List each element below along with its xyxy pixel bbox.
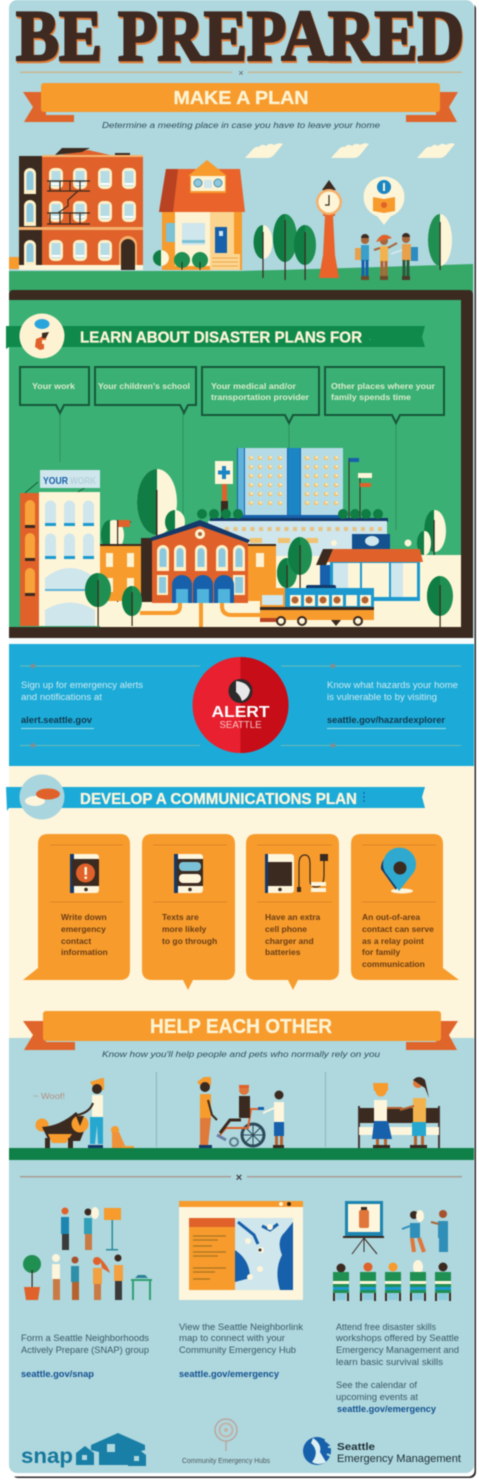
banner: learn about: LEARN ABOUT DISASTER PLANS FOR (80, 330, 362, 346)
banner: make a plan (23, 83, 458, 122)
icon: phone alert (70, 854, 99, 893)
callout: other places: Other places where your (331, 381, 436, 391)
text: workshops (335, 1322, 459, 1414)
logo: community emergency hubs: Community Emergency Hubs (182, 1458, 270, 1465)
panel: alert seattle (9, 644, 474, 766)
text: workshops: workshops offered by Seattle (335, 1333, 459, 1343)
office building: your work: YOUR (43, 476, 69, 487)
school (100, 520, 276, 603)
icon: phone texts (174, 854, 203, 893)
callout: school (95, 367, 196, 413)
text: workshops: upcoming events at (336, 1392, 419, 1402)
alert text right: is vulnerable to by visiting (327, 692, 437, 702)
text: snap: Actively Prepare (SNAP) group (21, 1345, 149, 1355)
banner: communications (6, 774, 425, 820)
callout: your work: Your work (32, 381, 75, 391)
bus (260, 585, 374, 626)
card text: Texts are (162, 912, 199, 922)
card text: emergency (61, 924, 106, 934)
reception desk with people (359, 1077, 439, 1148)
card text: as a relay point (362, 936, 424, 946)
trees (254, 214, 452, 280)
card: write down contacts (23, 834, 130, 980)
alert text right: Know what hazards your home (327, 680, 458, 690)
dividers (156, 1072, 326, 1147)
alert text left: Sign up for emergency alerts (21, 680, 144, 690)
card text: Have an extra (265, 912, 321, 922)
callout: school: Your children's school (98, 381, 190, 391)
logo: snap: snap (21, 1445, 73, 1468)
text: snap: seattle.gov/snap (21, 1369, 95, 1379)
alert text left: alert.seattle.gov (21, 715, 92, 725)
text: neighborlink: Community Emergency Hub (179, 1345, 296, 1355)
person standing (197, 1077, 217, 1148)
text: neighborlink: seattle.gov/emergency (179, 1369, 279, 1379)
ground (9, 257, 473, 292)
people: meeting group (355, 233, 418, 280)
panel: communications plan (9, 766, 474, 1038)
woof label: ~ Woof! (33, 1092, 65, 1101)
apartment building (19, 148, 143, 270)
divider: × (236, 1172, 242, 1184)
frame bottom (9, 627, 473, 638)
clouds (245, 143, 455, 158)
storefront (316, 534, 423, 601)
logo: seattle emergency management: Seattle (337, 1441, 375, 1453)
card text: charger and (265, 936, 314, 946)
alert text left: and notifications at (21, 692, 103, 702)
callout: medical provider: Your medical and/or (211, 381, 297, 391)
dog (36, 1112, 88, 1148)
person walking dog (78, 1078, 104, 1148)
card text: to go through (162, 936, 217, 946)
panel: learn about disaster plans (9, 290, 473, 638)
subtitle: meeting place: Determine a meeting place in case you have to leave your home (102, 120, 380, 130)
banner: communications: DEVELOP A COMMUNICATIONS PLAN (80, 791, 357, 808)
alert text left (21, 680, 144, 729)
card text: communication (362, 959, 425, 969)
text: workshops: seattle.gov/emergency (337, 1404, 436, 1414)
card: texts (142, 834, 235, 990)
card: out of area contact (351, 834, 459, 980)
logo: snap (21, 1433, 146, 1468)
connector lines (60, 413, 396, 530)
text: neighborlink (179, 1322, 304, 1379)
text: workshops: Attend free disaster skills (336, 1322, 436, 1332)
card text: for family (362, 947, 401, 957)
callout: medical provider (202, 367, 319, 423)
bushes (153, 250, 208, 270)
subtitle: help: Know how you'll help people and pets who normally rely on you (102, 1049, 380, 1059)
text: workshops: Emergency Management and (336, 1345, 459, 1355)
office building: your work: WORK (70, 476, 97, 487)
clock tower (316, 180, 342, 278)
callout: other places: family spends time (331, 392, 411, 402)
white gap (9, 638, 474, 644)
text: neighborlink: map to connect with your (179, 1333, 285, 1343)
text: neighborlink: View the Seattle Neighborlink (179, 1322, 304, 1332)
card text: contact can serve (362, 924, 434, 934)
callout: medical provider: transportation provider (211, 392, 310, 402)
illustration: neighborlink map (179, 1201, 303, 1300)
card text: contact (61, 936, 91, 946)
icon: map pin (381, 848, 416, 894)
card: charger (246, 834, 339, 990)
speech bubble: map (364, 176, 404, 225)
big tree behind school (101, 469, 185, 550)
logo: seattle emergency management: Emergency Management (337, 1453, 461, 1465)
text: workshops: See the calendar of (336, 1380, 418, 1390)
card text: An out-of-area (362, 912, 420, 922)
helper child (263, 1090, 284, 1148)
card text: information (61, 947, 108, 957)
paths (140, 603, 262, 627)
alert seattle logo: SEATTLE (220, 720, 262, 731)
illustration: neighbors group (23, 1207, 152, 1300)
alert text right: seattle.gov/hazardexplorer (327, 715, 446, 725)
alert text right (327, 680, 458, 729)
card text: Write down (61, 912, 107, 922)
divider: × (238, 68, 244, 78)
foreground trees (85, 510, 453, 627)
alert seattle logo (192, 657, 288, 753)
callout: other places (325, 367, 444, 423)
text: workshops: learn basic survival skills (336, 1357, 444, 1367)
hospital (208, 448, 388, 556)
text: snap (21, 1333, 150, 1379)
banner: learn about: · (369, 337, 371, 343)
text: snap: Form a Seattle Neighborhoods (21, 1333, 150, 1343)
card text: more likely (162, 924, 207, 934)
illustration: workshop (333, 1201, 451, 1301)
ground bar (9, 1148, 474, 1160)
wheelchair (217, 1085, 264, 1146)
banner: learn about (6, 314, 425, 358)
banner: help each other (23, 1011, 458, 1050)
hedges (197, 509, 383, 519)
cat (111, 1126, 134, 1148)
alert seattle logo: ALERT (212, 704, 270, 721)
card text: cell phone (265, 924, 307, 934)
banner: make a plan: MAKE A PLAN (174, 87, 308, 108)
card text: batteries (265, 947, 301, 957)
callout: your work (20, 367, 89, 413)
house (159, 160, 245, 270)
logo: community emergency hubs (182, 1419, 270, 1465)
logo: seattle emergency management (303, 1437, 461, 1465)
office building: your work (20, 470, 100, 626)
icon: phone and charger (265, 854, 328, 893)
banner: help each other: HELP EACH OTHER (150, 1016, 333, 1038)
